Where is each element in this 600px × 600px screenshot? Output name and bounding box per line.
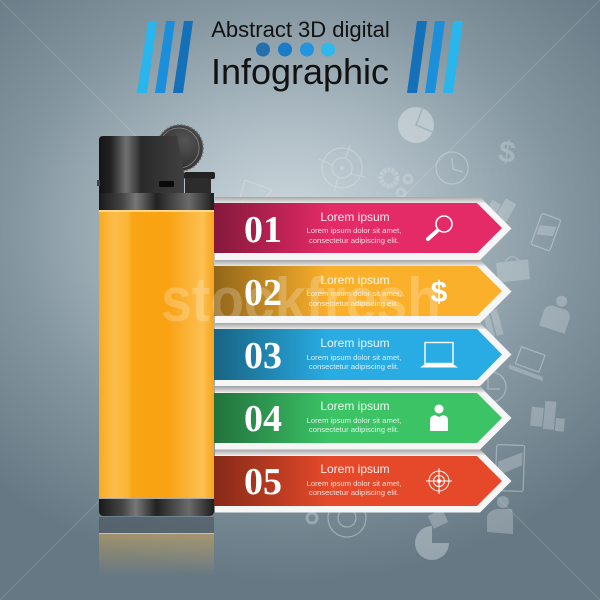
number: 01 (244, 209, 282, 251)
watermark: stockfresh (161, 266, 441, 335)
collar band (99, 193, 214, 210)
icon: pie chart (398, 107, 435, 143)
body: consectetur adipiscing elit. (309, 362, 399, 371)
title stripes right (407, 21, 463, 93)
icon: tablet (531, 213, 561, 251)
body (99, 210, 214, 498)
title dots (256, 42, 335, 56)
body: consectetur adipiscing elit. (309, 236, 399, 245)
lighter (97, 125, 215, 576)
background icons (240, 107, 576, 560)
body: consectetur adipiscing elit. (309, 299, 399, 308)
nozzle (184, 172, 215, 194)
body: Lorem ipsum dolor sit amet, (307, 289, 401, 298)
icon: clock 2 (476, 372, 506, 402)
arrow 1 (214, 197, 512, 260)
icon: buildings (484, 193, 516, 225)
icon: dollar: $ (431, 276, 448, 309)
body: Lorem ipsum dolor sit amet, (307, 416, 401, 425)
number: 05 (244, 461, 282, 503)
icon: briefcase (496, 255, 530, 283)
arrow body (214, 203, 502, 253)
heading: Lorem ipsum (320, 399, 390, 413)
heading: Lorem ipsum (320, 462, 390, 476)
icon: target (426, 468, 452, 494)
title stripes left (137, 21, 193, 93)
icon: tablet 2 (495, 445, 525, 491)
arrow 5 (214, 450, 512, 512)
side button (97, 180, 100, 186)
heading: Lorem ipsum (320, 273, 390, 287)
arrow body (214, 329, 502, 380)
flint wheel (157, 125, 203, 171)
number: 02 (244, 272, 282, 314)
title line 1: Abstract 3D digital (211, 17, 390, 42)
number: 04 (244, 398, 282, 440)
icon: gear bottom (307, 513, 317, 523)
icon: magnifier (428, 216, 452, 239)
icon: dollar: $ (496, 135, 518, 170)
title line 2: Infographic (211, 51, 389, 92)
icon: person (430, 404, 448, 431)
reflection (99, 517, 214, 576)
arrow body (214, 456, 502, 506)
arrow 2 (214, 260, 512, 323)
icon: pie bottom (415, 526, 449, 560)
icon: target (319, 145, 365, 191)
icon: target bottom (328, 499, 366, 537)
icon: clock (436, 152, 468, 184)
cap slot (159, 181, 174, 187)
body: consectetur adipiscing elit. (309, 488, 399, 497)
icon: laptop (507, 345, 552, 381)
heading: Lorem ipsum (320, 336, 390, 350)
body: consectetur adipiscing elit. (309, 425, 399, 434)
arrow body (214, 393, 502, 443)
body: Lorem ipsum dolor sit amet, (307, 353, 401, 362)
cap (99, 136, 184, 193)
arrow 3 (214, 323, 512, 386)
base (99, 498, 214, 516)
arrow 4 (214, 386, 512, 450)
icon: person (539, 292, 576, 334)
icon: binders (482, 309, 504, 338)
icon: gears (381, 170, 412, 197)
icon: person 2 (487, 496, 513, 534)
arrow body (214, 266, 502, 316)
icon: buildings bottom (428, 509, 448, 529)
icon: laptop top (240, 180, 272, 198)
body: Lorem ipsum dolor sit amet, (307, 479, 401, 488)
heading: Lorem ipsum (320, 210, 390, 224)
icon: laptop (420, 342, 458, 368)
number: 03 (244, 335, 282, 377)
icon: buildings 2 (530, 400, 566, 432)
body: Lorem ipsum dolor sit amet, (307, 226, 401, 235)
